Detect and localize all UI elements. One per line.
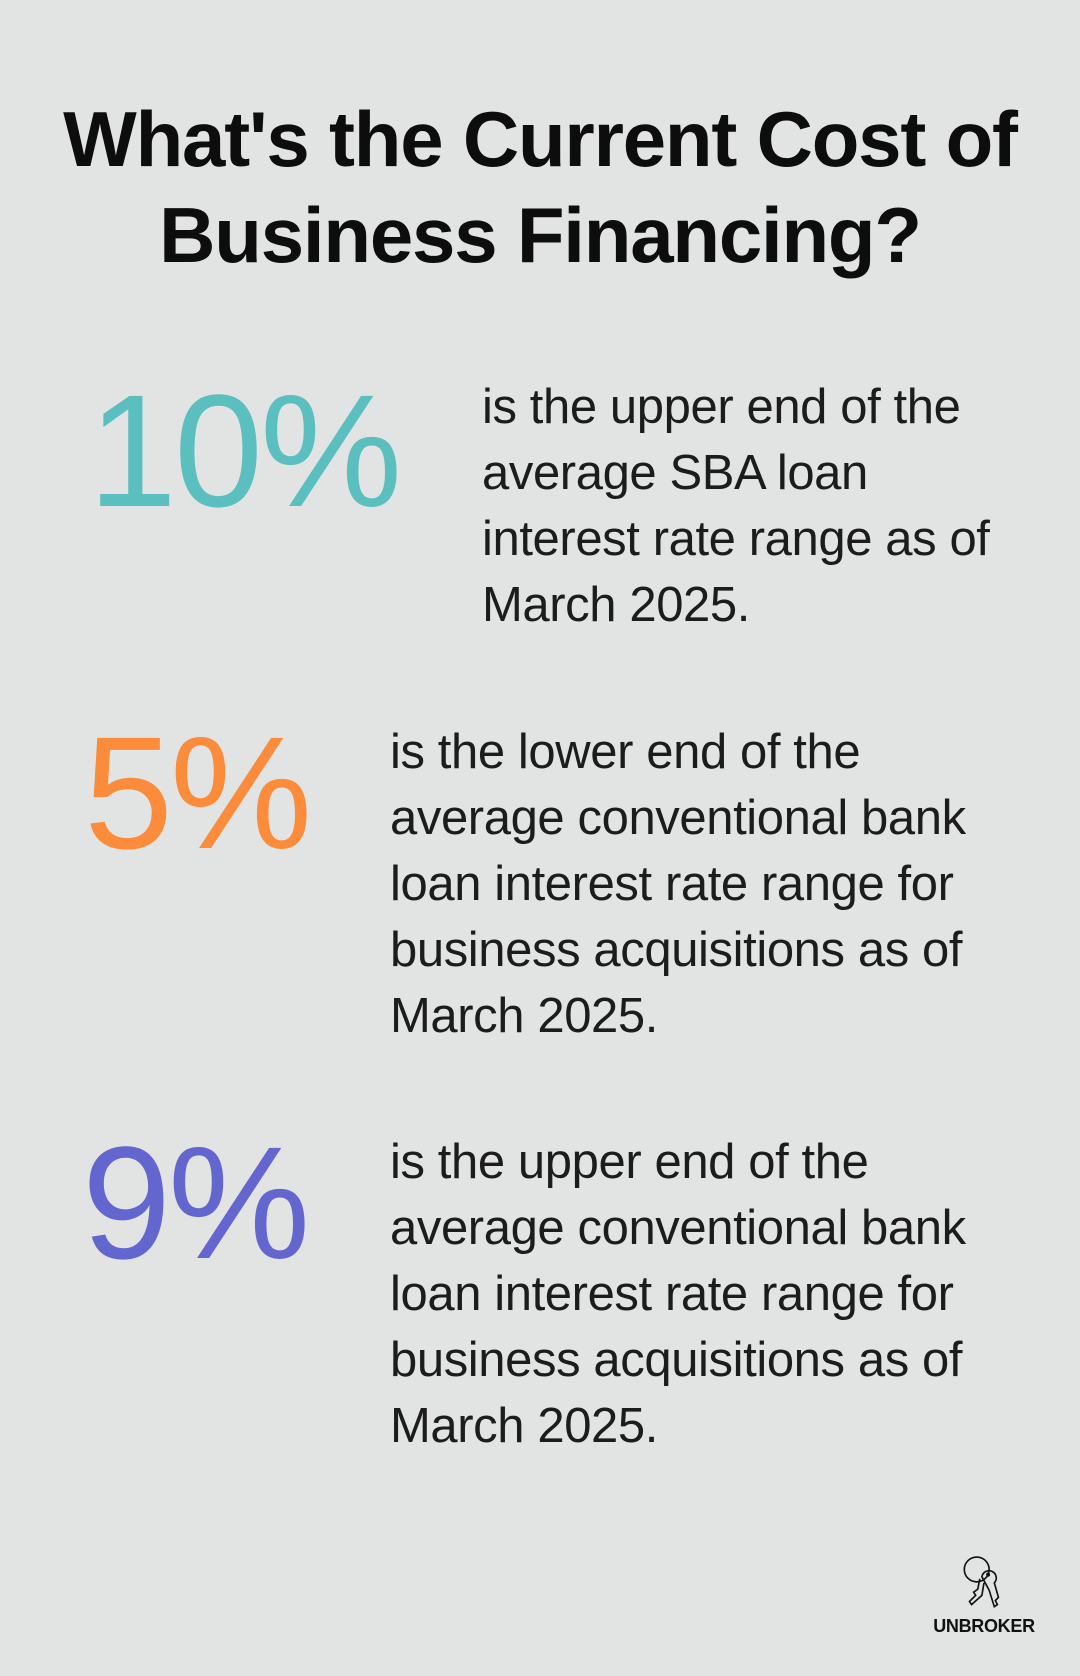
text: 5% description: average conventional bank <box>390 791 966 845</box>
text: 10% description: March 2025. <box>482 578 750 632</box>
text: 9% description: average conventional bank <box>390 1201 966 1255</box>
text: 9% description: is the upper end of the <box>390 1135 868 1189</box>
number: 9%: 9% <box>82 1113 307 1292</box>
text: 5% description <box>390 725 966 1043</box>
text: 10% description: average SBA loan <box>482 446 868 500</box>
title: What's the Current Cost of <box>63 95 1017 183</box>
text: 10% description <box>482 380 990 632</box>
text: 9% description: business acquisitions as of <box>390 1333 962 1387</box>
text: 5% description: business acquisitions as of <box>390 923 962 977</box>
number: 10%: 10% <box>88 361 399 540</box>
text: 10% description: interest rate range as of <box>482 512 990 566</box>
title <box>63 95 1018 279</box>
number: 5%: 5% <box>84 703 309 882</box>
text: 5% description: loan interest rate range for <box>390 857 954 911</box>
text: 9% description: loan interest rate range for <box>390 1267 954 1321</box>
icon: keys <box>964 1556 1000 1608</box>
text: 5% description: March 2025. <box>390 989 658 1043</box>
title: Business Financing? <box>159 191 921 279</box>
text: 5% description: is the lower end of the <box>390 725 860 779</box>
text: 9% description: March 2025. <box>390 1399 658 1453</box>
text: 10% description: is the upper end of the <box>482 380 960 434</box>
text: 9% description <box>390 1135 966 1453</box>
logo text: UNBROKER <box>933 1616 1035 1636</box>
stat: 10% <box>88 361 990 632</box>
logo: Unbroker <box>933 1556 1035 1636</box>
stat: 9% <box>82 1113 966 1453</box>
stat: 5% <box>84 703 966 1043</box>
